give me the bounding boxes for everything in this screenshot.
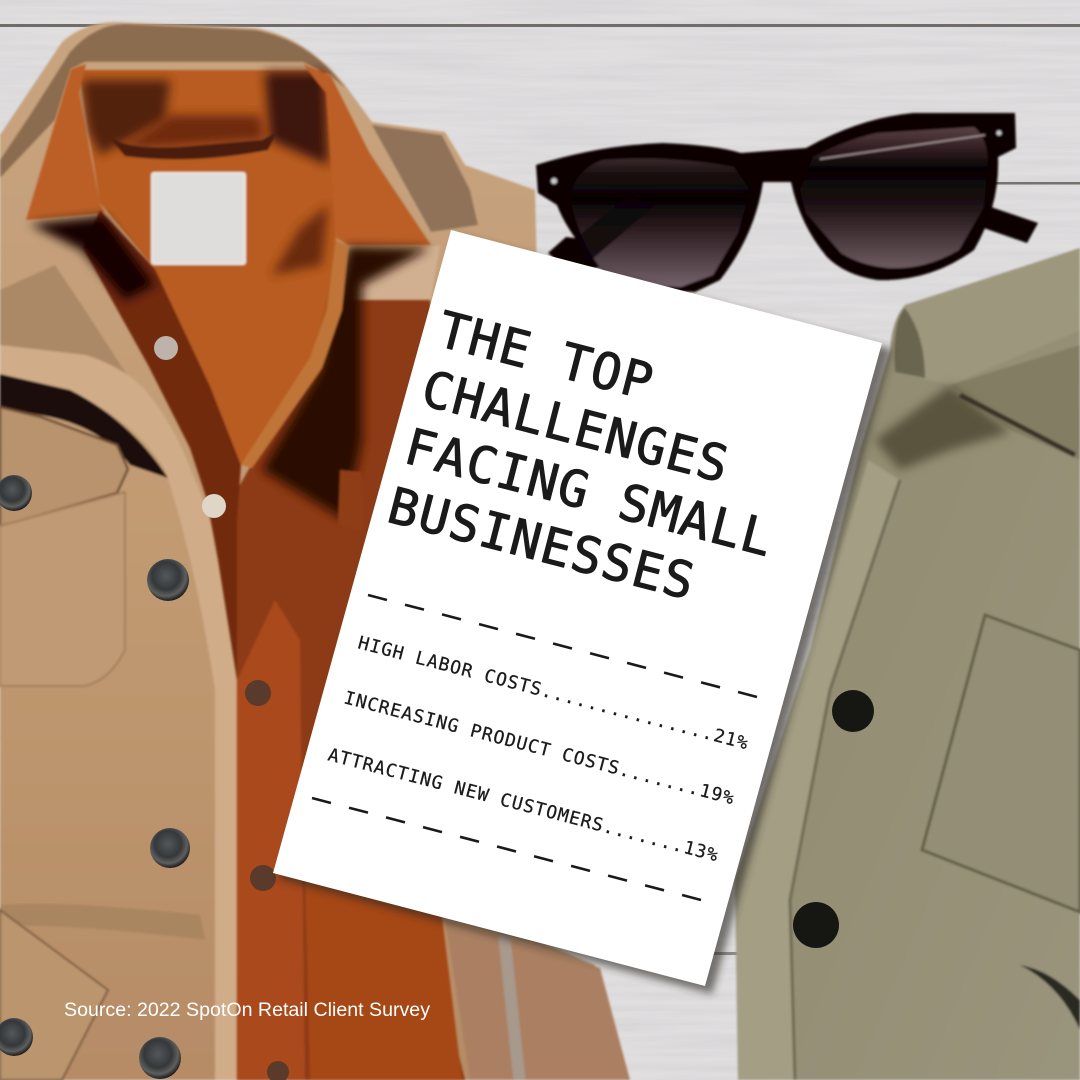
challenge list: INCREASING PRODUCT COSTS.......19% <box>342 688 736 809</box>
receipt title: BUSINESSES <box>382 476 702 611</box>
neck tag <box>152 173 245 264</box>
upper pocket flap <box>0 407 128 526</box>
sunglasses <box>536 113 1038 292</box>
inner collar edge stripe <box>241 240 348 468</box>
receipt title: THE TOP <box>432 300 660 412</box>
collar underside shadows <box>30 216 155 300</box>
placket tab <box>338 470 362 530</box>
lens rim highlight <box>820 135 985 159</box>
receipt paper <box>273 230 882 986</box>
lower panel with zipper <box>445 920 630 1080</box>
shirt collar: right leaf <box>303 64 431 245</box>
shirt body below the neck <box>237 300 465 1080</box>
receipt title <box>382 300 780 611</box>
receipt shadow <box>279 236 892 994</box>
placket <box>83 210 241 680</box>
frame <box>536 113 1016 292</box>
dark inner neck patches <box>82 80 170 155</box>
challenge list <box>326 633 750 866</box>
challenge list: HIGH LABOR COSTS...............21% <box>356 633 750 754</box>
shoulder texture <box>372 125 478 232</box>
lapel shadow <box>0 374 168 478</box>
receipt card <box>273 230 892 994</box>
receipt title: CHALLENGES <box>416 359 736 494</box>
hanger loop <box>108 132 277 159</box>
tan jacket, left <box>0 22 630 1080</box>
lens: left <box>570 159 750 287</box>
olive pocket flap <box>922 615 1080 912</box>
buttons <box>0 336 874 1080</box>
arm seen through left lens <box>577 197 655 263</box>
orange shirt <box>26 64 465 1080</box>
jacket collar band <box>0 24 345 178</box>
temples <box>548 237 600 268</box>
upper chest quilting <box>0 265 140 395</box>
receipt title: FACING SMALL <box>399 417 780 568</box>
olive placket <box>735 460 900 1080</box>
inner right panel <box>356 245 440 600</box>
challenge list: ATTRACTING NEW CUSTOMERS.......13% <box>326 745 720 866</box>
source note: Source: 2022 SpotOn Retail Client Survey <box>64 1000 431 1021</box>
bottom dashed divider <box>312 798 701 900</box>
pocket body <box>0 492 125 686</box>
lens: right <box>800 127 988 268</box>
top dashed divider <box>368 595 757 697</box>
olive jacket, right <box>735 248 1080 1080</box>
olive collar <box>894 248 1080 385</box>
inside shirt back <box>79 70 336 465</box>
lower tan folds <box>0 904 205 940</box>
front edge band <box>0 345 237 1080</box>
shirt collar: left leaf <box>26 64 105 220</box>
